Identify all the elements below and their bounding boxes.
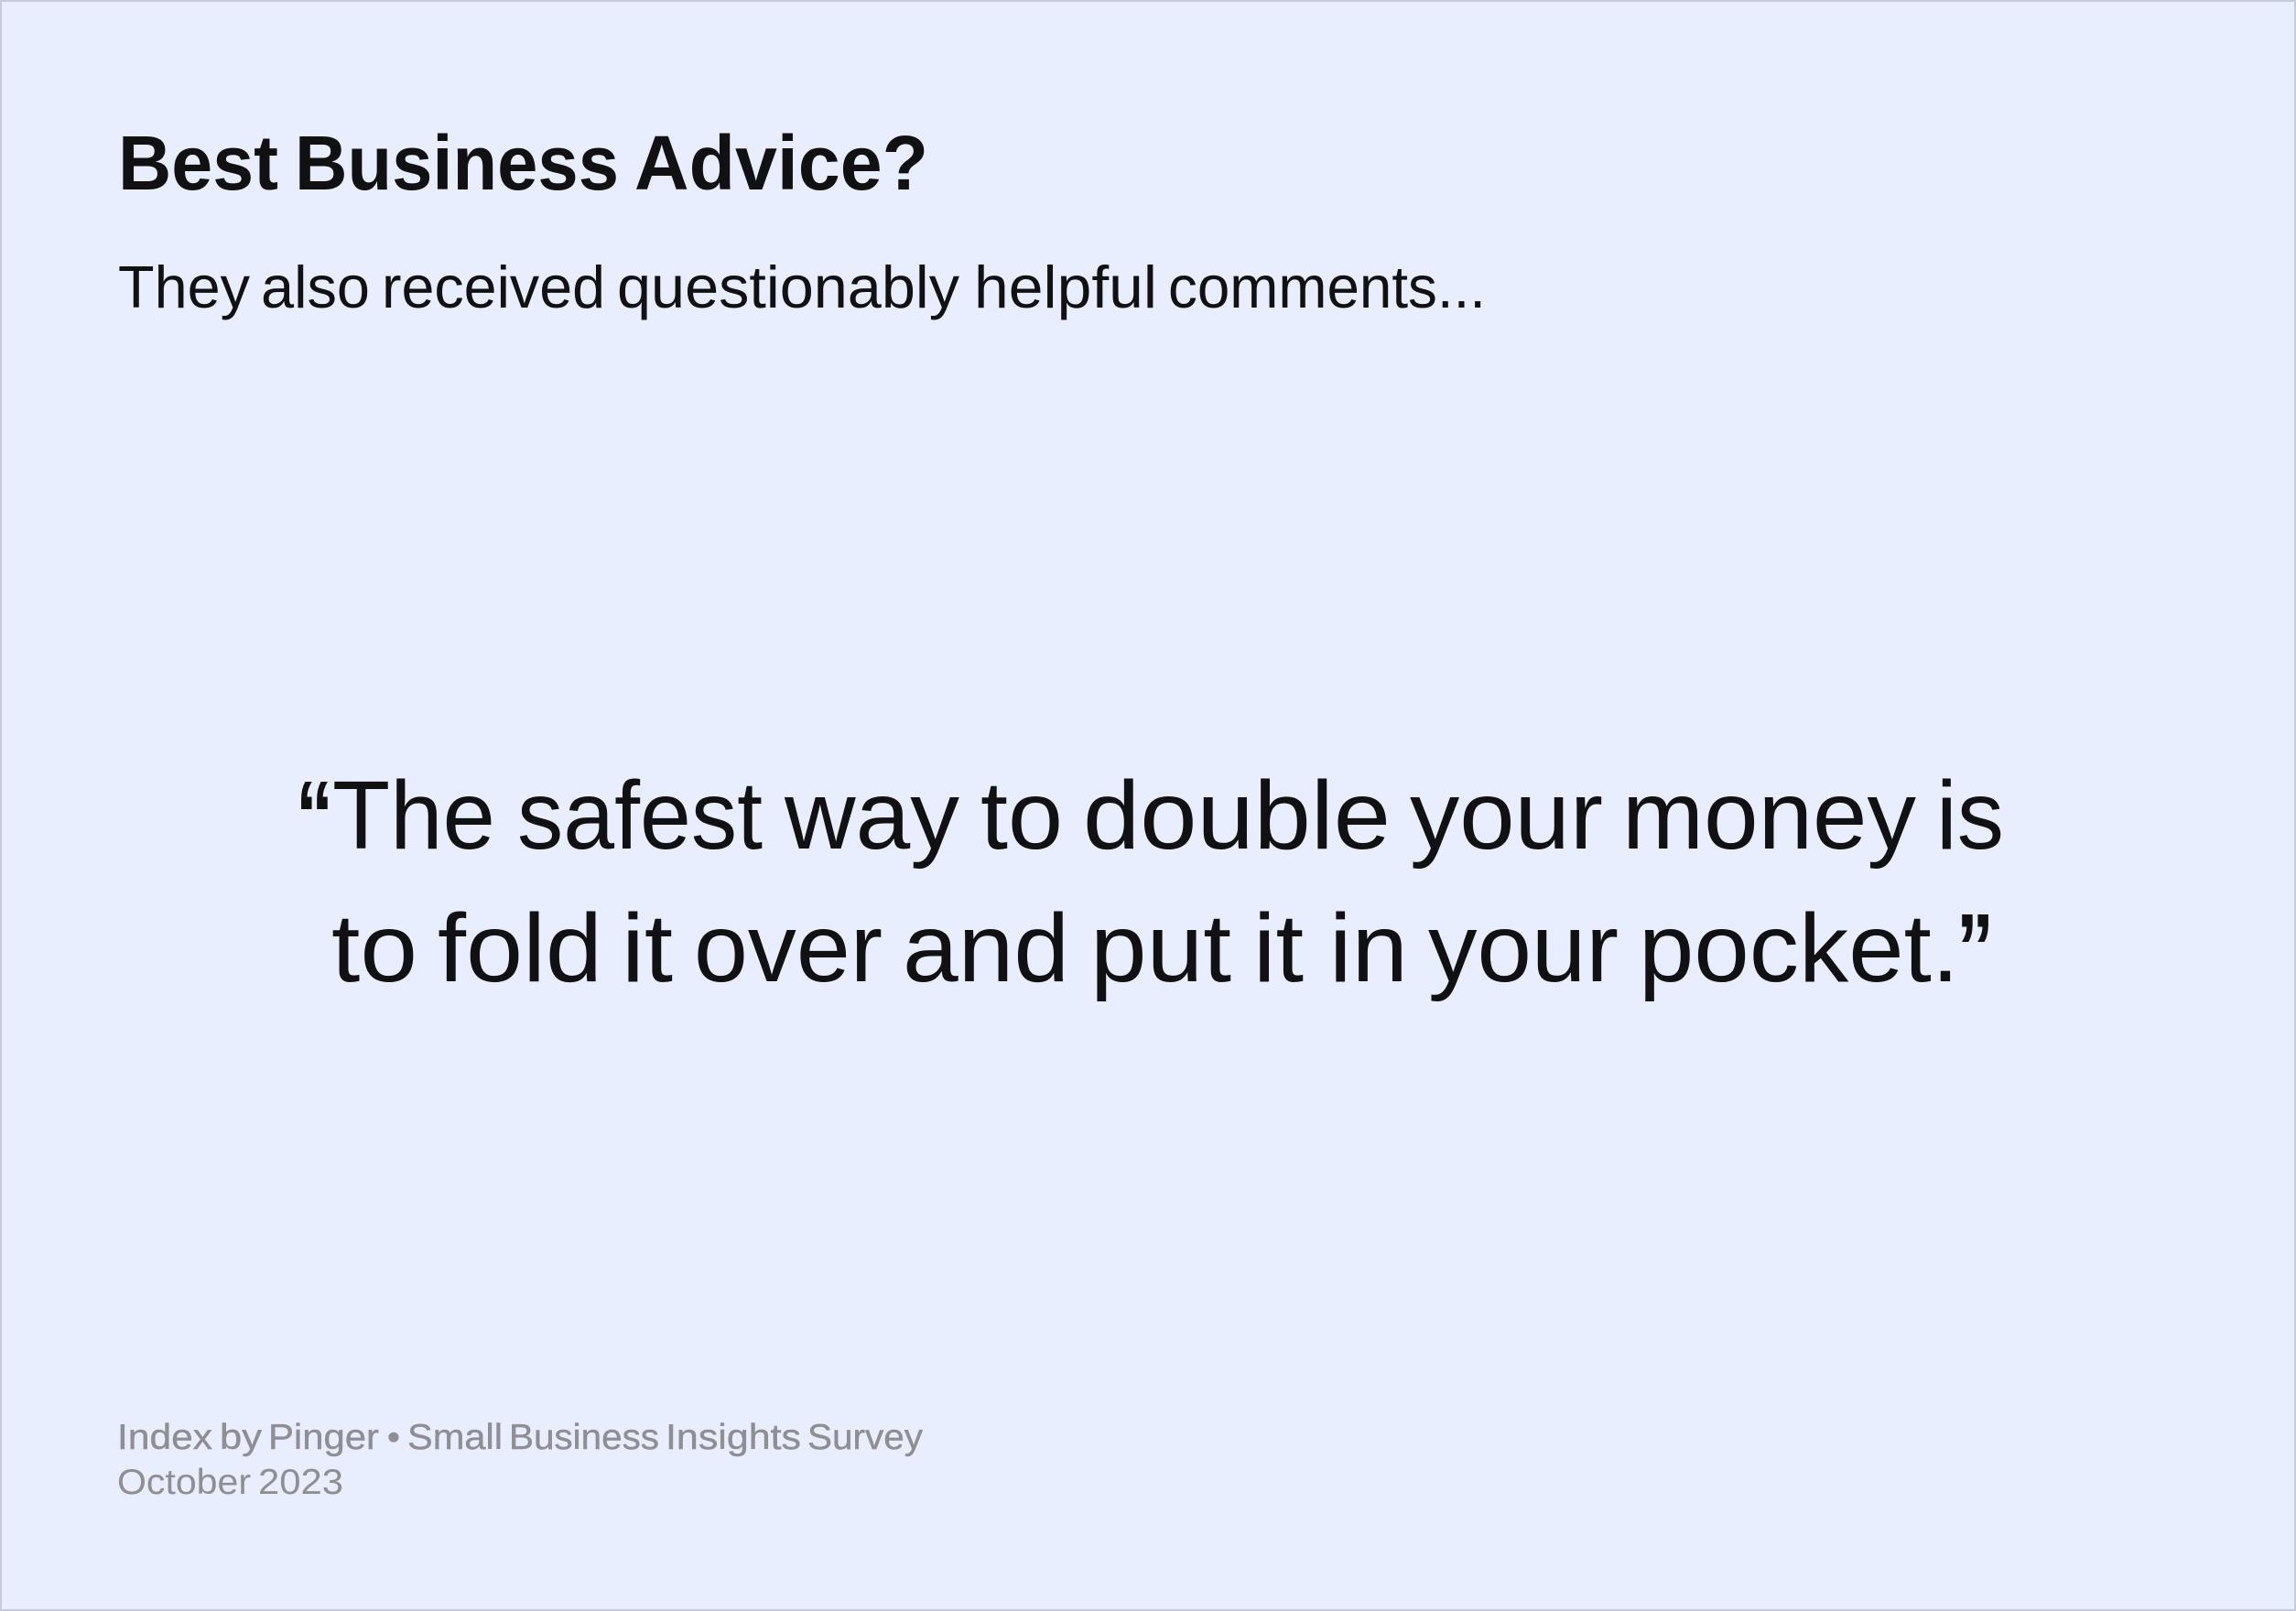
quote line 2: and [903,894,1069,1002]
subtitle [118,254,1486,320]
quote line 2: in [1329,894,1408,1002]
quote line 2 [331,894,1994,1002]
subtitle: questionably [617,254,960,320]
footer line 1: Business [509,1418,659,1457]
quote line 2: it [1253,894,1304,1002]
quote line 2: put [1090,894,1231,1002]
quote line 2: it [622,894,673,1002]
quote line 2: fold [438,894,602,1002]
footer line 2: October [117,1463,251,1502]
footer line 1: Index [117,1418,213,1457]
footer line 1: Survey [807,1418,924,1457]
footer line 2: 2023 [258,1463,343,1502]
footer line 1: by [220,1418,263,1457]
quote line 1 [296,762,2004,870]
quote line 1: double [1083,762,1391,870]
quote line 1: The [332,762,495,870]
subtitle: also [261,254,370,320]
quote [296,762,2004,1002]
footer source [117,1418,924,1502]
quote line 1: your [1410,762,1603,870]
title: Advice? [634,120,928,206]
quote line 2: your [1428,894,1619,1002]
title: Best [118,120,278,206]
quote line 1: is [1936,762,2004,870]
footer line 1: Pinger [268,1418,379,1457]
subtitle: They [118,254,250,320]
subtitle: received [382,254,605,320]
quote line 1: way [784,762,959,870]
quote line 2: ” [1956,894,1994,1002]
quote line 2: over [694,894,883,1002]
subtitle: comments... [1168,254,1486,320]
title: Business [295,120,619,206]
footer line 1: Insights [666,1418,801,1457]
title [118,120,928,206]
quote line 1: money [1622,762,1916,870]
quote line 1: “ [296,762,333,870]
subtitle: helpful [974,254,1157,320]
footer line 2 [117,1463,343,1502]
quote line 1: safest [517,762,763,870]
quote line 2: pocket. [1639,894,1959,1002]
footer line 1 [117,1418,924,1457]
footer line 1: • [387,1418,400,1457]
quote line 2: to [331,894,417,1002]
footer line 1: Small [407,1418,503,1457]
quote line 1: to [980,762,1063,870]
